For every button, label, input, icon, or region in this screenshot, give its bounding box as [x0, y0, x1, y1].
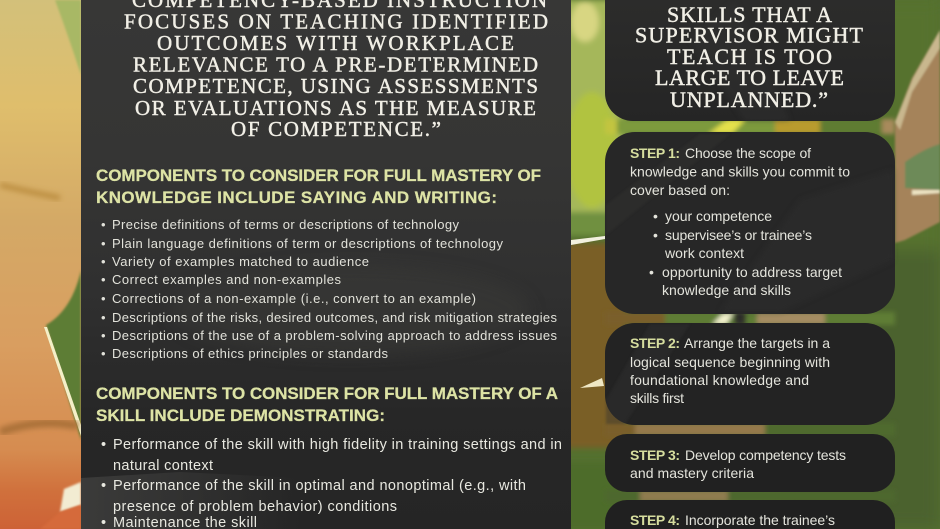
list: skill components: • [101, 437, 106, 453]
panel: step 1: • [649, 264, 654, 280]
panel: unplanned skills pull quote: TEACH IS TOO [667, 44, 832, 69]
heading: skill components: SKILL INCLUDE DEMONSTRATING: [96, 406, 385, 425]
list: skill components: presence of problem behavior) conditions [113, 499, 397, 515]
panel: step 1 [605, 132, 895, 314]
panel: unplanned skills pull quote: LARGE TO LEAVE [655, 65, 844, 90]
panel: step 3 [605, 434, 895, 492]
heading: skill components [96, 384, 558, 425]
list: skill components: Performance of the skill with high fidelity in training settings and in [113, 437, 562, 453]
panel: step 1: Choose the scope of [685, 145, 811, 161]
panel: unplanned skills pull quote [605, 0, 895, 121]
list: knowledge components: Descriptions of ethics principles or standards [112, 346, 388, 361]
panel: step 2: foundational knowledge and [630, 372, 809, 388]
panel: step 1: • [653, 227, 658, 243]
finger [0, 0, 81, 529]
panel: step 4 [605, 500, 895, 529]
panel: step 2 [605, 323, 895, 425]
gap: step 1 to step 2 [605, 312, 895, 325]
list: knowledge components: Plain language definitions of term or descriptions of technology [112, 236, 503, 251]
list: knowledge components: Corrections of a non-example (i.e., convert to an example) [112, 291, 476, 306]
gap: quote to step 1 [605, 119, 895, 134]
list: skill components [101, 437, 562, 529]
list: knowledge components: • [101, 291, 106, 306]
branch [895, 30, 940, 243]
panel: step 2: STEP 2: [630, 335, 680, 351]
panel: step 3: STEP 3: [630, 447, 680, 463]
list: knowledge components: • [101, 346, 106, 361]
list: skill components: • [101, 478, 106, 494]
pull quote: competency-based instruction: OR EVALUATIONS AS THE MEASURE [135, 96, 536, 120]
panel: unplanned skills pull quote: SUPERVISOR MIGHT [635, 22, 864, 48]
panel: step 1: supervisee’s or trainee’s [665, 227, 812, 243]
list: knowledge components: • [101, 236, 106, 251]
panel: unplanned skills pull quote: SKILLS THAT A [667, 2, 832, 27]
heading: knowledge components: KNOWLEDGE INCLUDE SAYING AND WRITING: [96, 188, 497, 207]
panel: step 1: opportunity to address target [662, 264, 842, 280]
pull quote: competency-based instruction: OF COMPETENCE.” [231, 117, 441, 141]
panel: step 3: and mastery criteria [630, 465, 754, 481]
list: knowledge components: Descriptions of the risks, desired outcomes, and risk mitigation strategies [112, 310, 558, 325]
list: skill components: natural context [113, 458, 213, 474]
list: knowledge components: • [101, 272, 106, 287]
panel: step 1: • [653, 208, 658, 224]
panel: step 1: work context [664, 245, 744, 261]
gap: step 2 to step 3 [605, 423, 895, 436]
panel: unplanned skills pull quote: UNPLANNED.” [670, 87, 828, 112]
panel: step 3: Develop competency tests [685, 447, 846, 463]
panel: step 1: your competence [665, 208, 772, 224]
panel: step 1: knowledge and skills [662, 282, 791, 298]
list: skill components: Performance of the skill in optimal and nonoptimal (e.g., with [113, 478, 526, 494]
list: knowledge components [101, 217, 558, 361]
panel: step 2: Arrange the targets in a [684, 335, 830, 351]
pull quote: competency-based instruction: OUTCOMES WITH WORKPLACE [157, 31, 514, 55]
list: knowledge components: • [101, 310, 106, 325]
list: knowledge components: Correct examples and non-examples [112, 272, 342, 287]
pull quote: competency-based instruction: FOCUSES ON TEACHING IDENTIFIED [124, 10, 548, 34]
list: knowledge components: • [101, 217, 106, 232]
gap: step 3 to step 4 [605, 490, 895, 502]
panel: step 4: STEP 4: [630, 512, 680, 528]
right green backdrop [780, 0, 940, 529]
pull quote: competency-based instruction [124, 0, 548, 141]
list: knowledge components: • [101, 254, 106, 269]
list: knowledge components: Descriptions of the use of a problem-solving approach to address issues [112, 328, 558, 343]
pull quote: competency-based instruction: RELEVANCE TO A PRE-DETERMINED [133, 52, 538, 76]
pull quote: competency-based instruction: COMPETENCE, USING ASSESSMENTS [133, 74, 538, 98]
list: knowledge components: • [101, 328, 106, 343]
list: knowledge components: Precise definitions of terms or descriptions of technology [112, 217, 460, 232]
panel: step 4: Incorporate the trainee’s [685, 512, 835, 528]
panel: step 1: cover based on: [630, 182, 730, 198]
panel: competency-based instruction [81, 0, 571, 529]
panel: step 2: logical sequence beginning with [630, 354, 830, 370]
heading: knowledge components: COMPONENTS TO CONSIDER FOR FULL MASTERY OF [96, 166, 541, 185]
panel: step 1: STEP 1: [630, 145, 680, 161]
fruit and gap strip [565, 0, 625, 529]
heading: skill components: COMPONENTS TO CONSIDER FOR FULL MASTERY OF A [96, 384, 558, 403]
panel: step 2: skills first [630, 390, 684, 406]
panel: step 1: knowledge and skills you commit to [630, 164, 850, 180]
list: knowledge components: Variety of examples matched to audience [112, 254, 369, 269]
heading: knowledge components [96, 166, 541, 207]
